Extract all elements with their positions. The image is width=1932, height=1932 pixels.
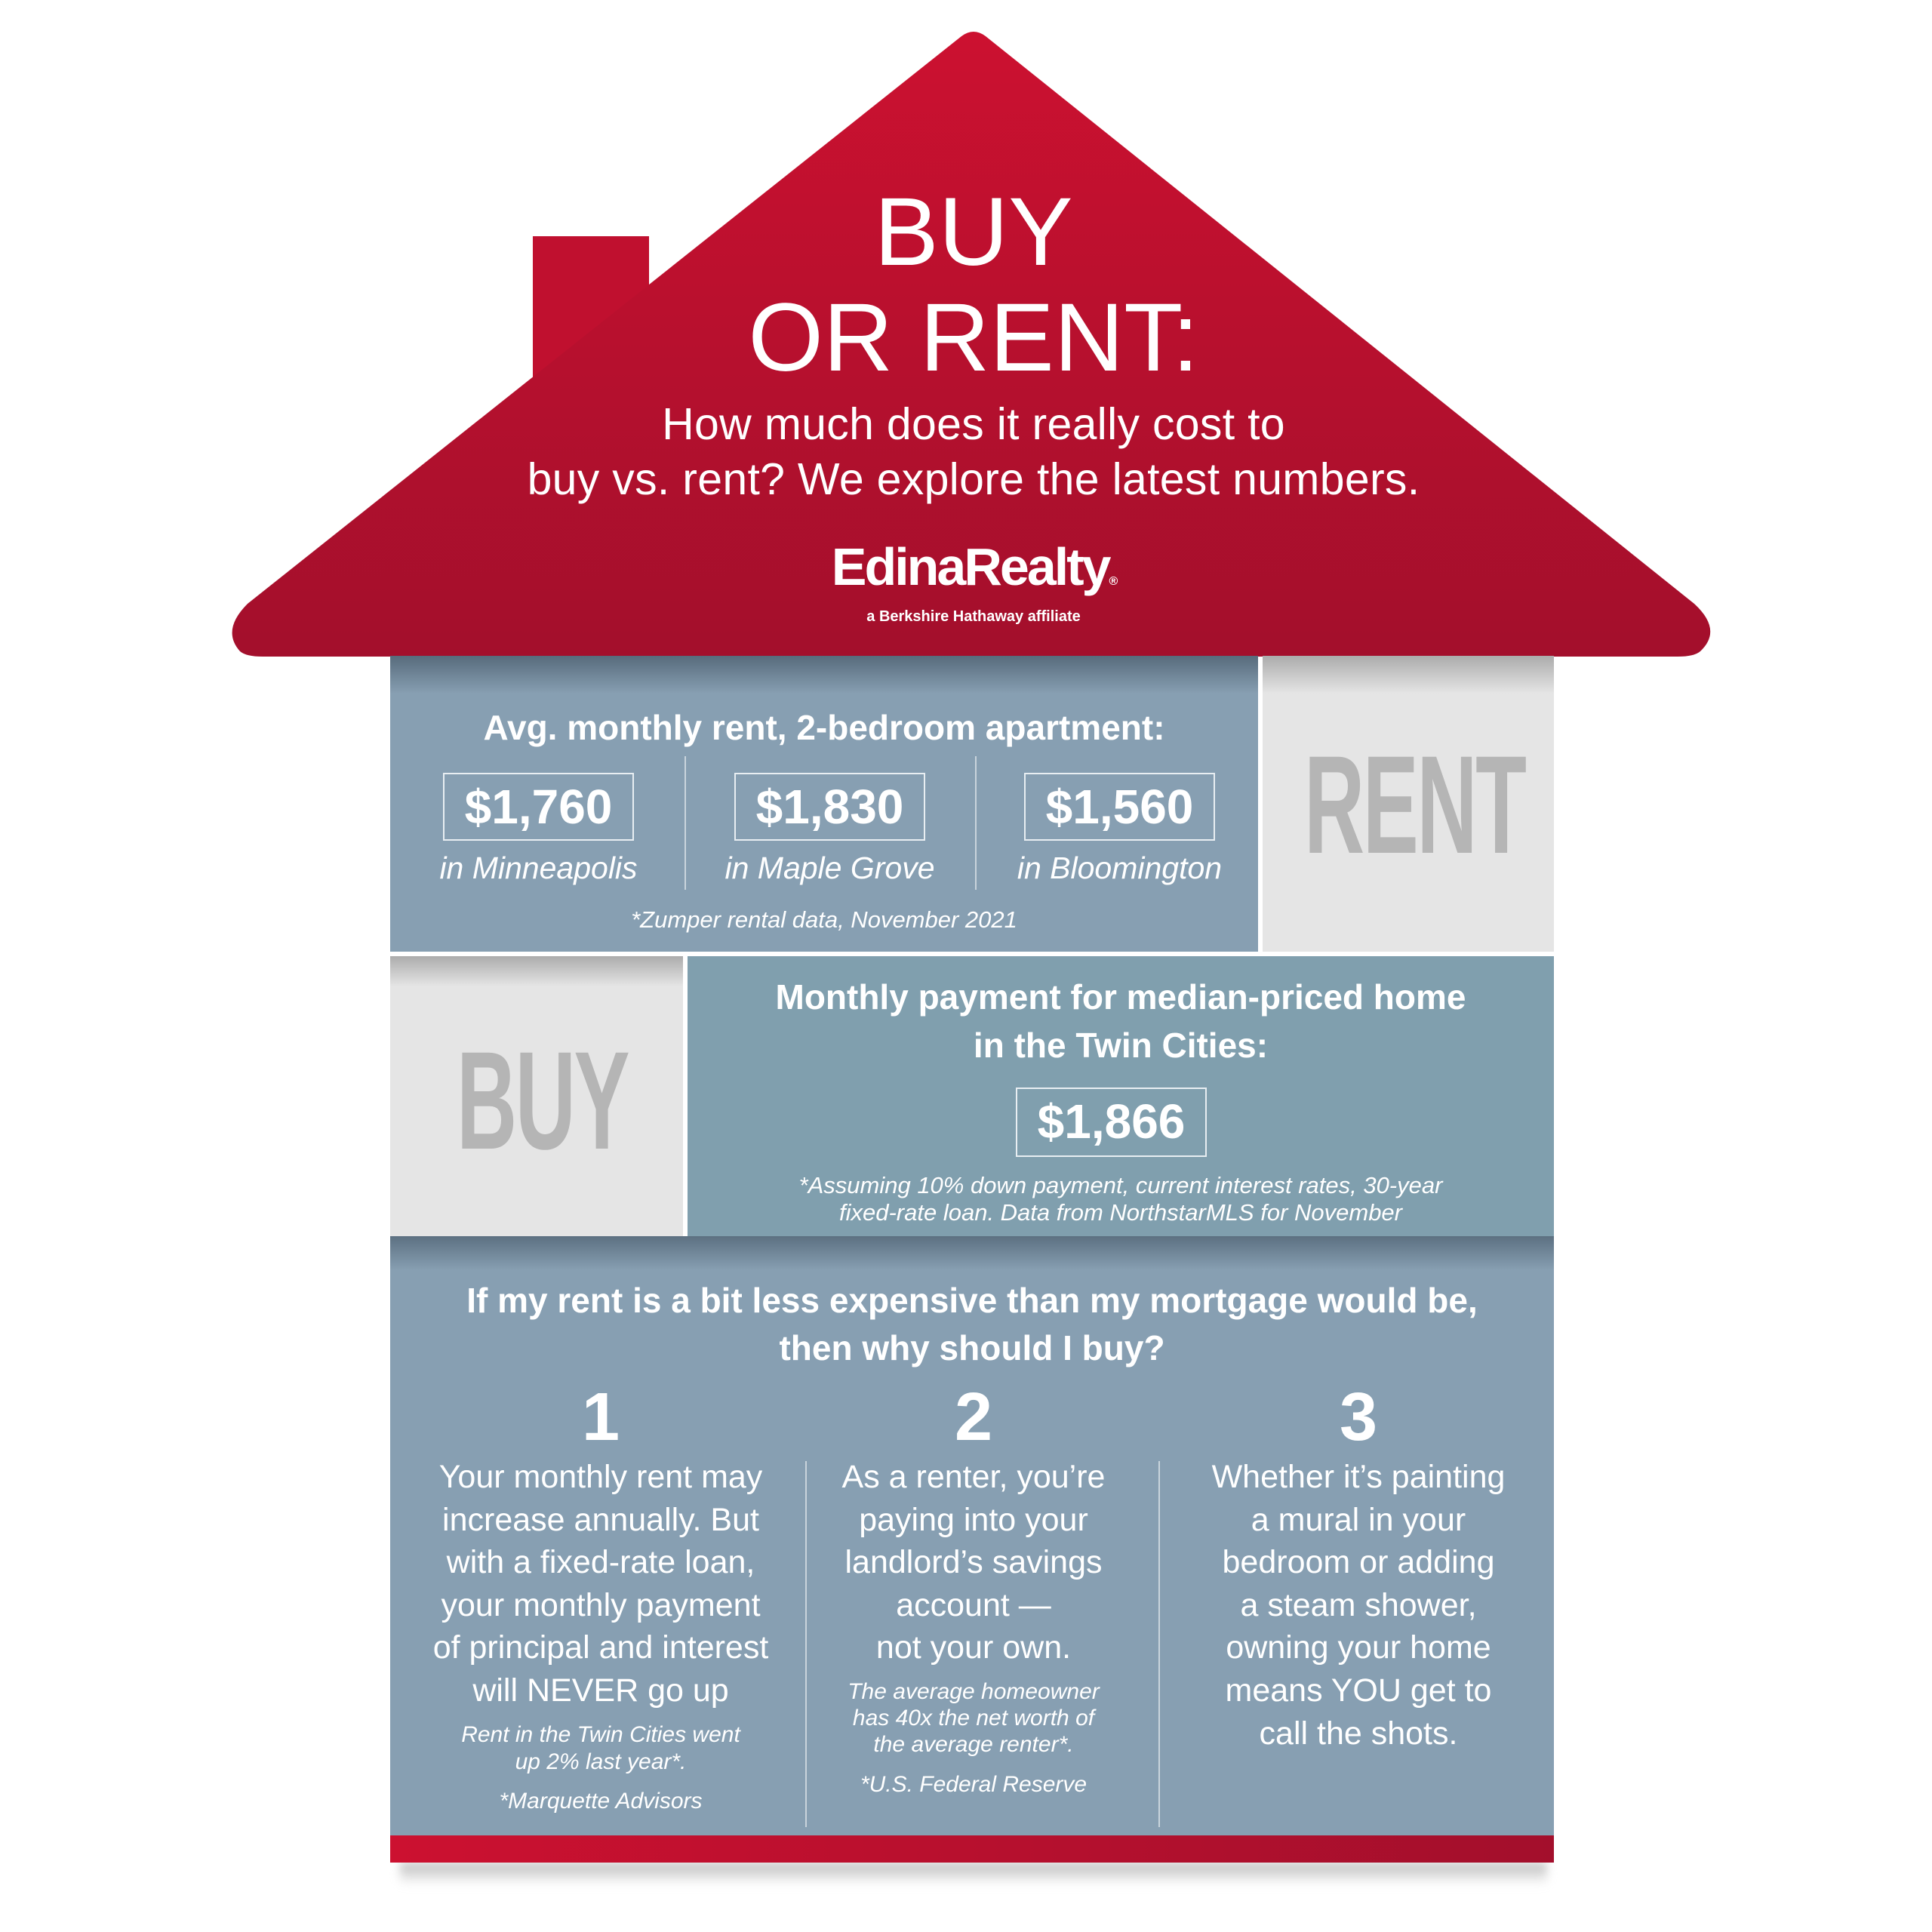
reason 3 — [1212, 1380, 1505, 1752]
buy heading: Monthly payment for median-priced home — [776, 977, 1466, 1017]
reason 1 — [433, 1380, 768, 1814]
roof — [232, 32, 1710, 657]
panel: buy — [688, 956, 1554, 1236]
reason 2: 2 — [955, 1380, 992, 1455]
price: buy: $1,866 — [1038, 1094, 1185, 1149]
panel: rent: in Bloomington — [1017, 851, 1222, 885]
BUY word: BUY — [457, 1023, 628, 1179]
reason 3: means YOU get to — [1226, 1672, 1491, 1709]
buy heading — [776, 977, 1466, 1065]
reason 2: the average renter*. — [873, 1732, 1074, 1757]
reason 3: owning your home — [1226, 1629, 1491, 1666]
title: OR RENT: — [748, 284, 1199, 392]
price: Bloomington: $1,560 — [1046, 780, 1193, 834]
panel: rent: in Maple Grove — [724, 851, 934, 885]
reason 2: *U.S. Federal Reserve — [860, 1772, 1087, 1797]
panel: rent — [390, 656, 1258, 952]
buy footnote: fixed-rate loan. Data from NorthstarMLS for November — [839, 1199, 1402, 1226]
buy footnote: *Assuming 10% down payment, current interest rates, 30-year — [799, 1172, 1442, 1198]
price: Bloomington — [1024, 773, 1215, 841]
reason 1: 1 — [582, 1380, 620, 1455]
logo: Edina Realty — [832, 537, 1118, 625]
reason 2: not your own. — [876, 1629, 1071, 1666]
reason 2: has 40x the net worth of — [853, 1706, 1094, 1730]
subtitle: buy vs. rent? We explore the latest numbers. — [528, 454, 1420, 504]
reason 1: *Marquette Advisors — [499, 1789, 702, 1814]
panel: rent label — [1263, 656, 1554, 952]
price: Minneapolis: $1,760 — [465, 780, 612, 834]
subtitle: How much does it really cost to — [662, 399, 1285, 449]
buy heading: in the Twin Cities: — [974, 1026, 1268, 1065]
reason 3: 3 — [1340, 1380, 1377, 1455]
logo: Edina Realty: EdinaRealty® — [832, 537, 1115, 596]
reason 1: Your monthly rent may increase annually. But with a fixed-rate loan, your monthly payment of principal and interest will NEVER go up — [433, 1459, 768, 1709]
panel: why buy — [390, 1236, 1554, 1835]
reason 3: Whether it’s painting — [1212, 1459, 1505, 1495]
title: BUY — [874, 178, 1073, 286]
reason 2: As a renter, you’re paying into your landlord’s savings account — — [842, 1459, 1105, 1623]
rent footnote: *Zumper rental data, November 2021 — [631, 906, 1017, 933]
price: Maple Grove — [734, 773, 925, 841]
logo: Edina Realty: a Berkshire Hathaway affiliate — [866, 608, 1081, 625]
subtitle — [528, 399, 1420, 504]
question heading — [466, 1281, 1478, 1367]
question heading: If my rent is a bit less expensive than my mortgage would be, — [466, 1281, 1478, 1320]
red base bar — [390, 1835, 1554, 1863]
RENT word: RENT — [1304, 728, 1525, 883]
price: Minneapolis — [443, 773, 634, 841]
panel: buy label — [390, 956, 683, 1236]
price: buy — [1016, 1088, 1207, 1157]
reason 3: a mural in your — [1251, 1502, 1466, 1538]
reason 3: a steam shower, — [1240, 1587, 1477, 1623]
house shadow — [400, 1863, 1547, 1885]
reason 1: Rent in the Twin Cities went — [461, 1722, 740, 1747]
rent heading: Avg. monthly rent, 2-bedroom apartment: — [483, 708, 1165, 747]
reason 2: The average homeowner — [848, 1679, 1100, 1704]
price: Maple Grove: $1,830 — [756, 780, 903, 834]
reason 3: bedroom or adding — [1223, 1544, 1494, 1580]
buy footnote — [799, 1172, 1443, 1226]
question heading: then why should I buy? — [779, 1328, 1165, 1367]
panel: rent: in Minneapolis — [439, 851, 638, 885]
reason 3: call the shots. — [1260, 1715, 1457, 1752]
title — [748, 178, 1199, 392]
reason 2 — [842, 1380, 1105, 1797]
reason 1: up 2% last year*. — [515, 1749, 686, 1774]
